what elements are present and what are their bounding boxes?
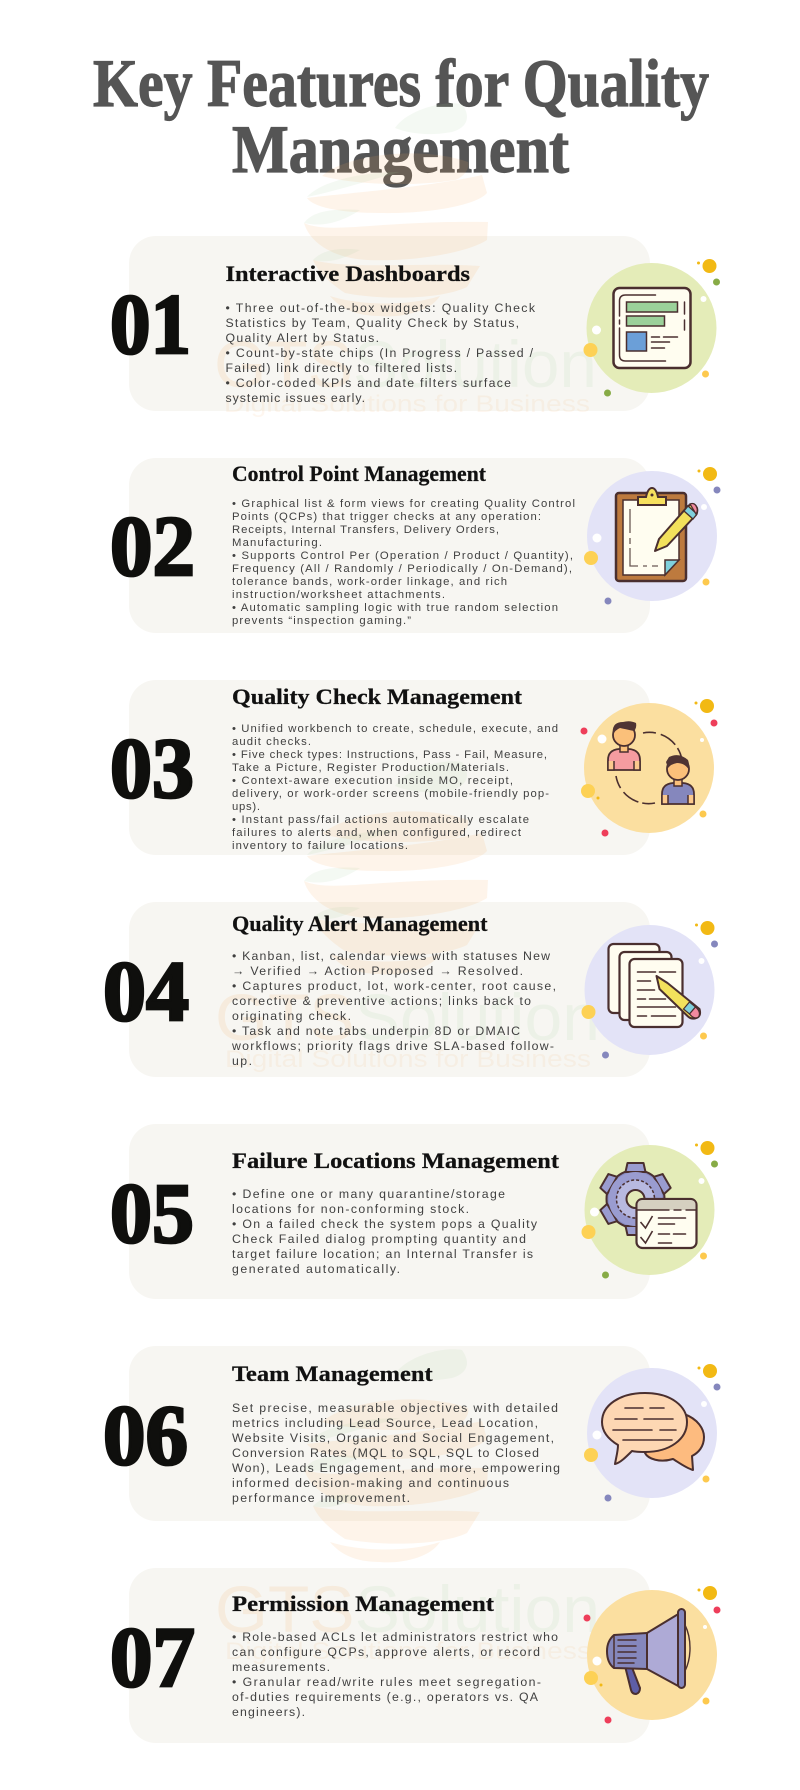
text block: card 06: Won), Leads Engagement, and more, empowering <box>232 1461 560 1475</box>
text block: card 02: Points (QCPs) that trigger checks at any operation: <box>232 511 541 523</box>
text block: card 02: Manufacturing. <box>232 537 322 549</box>
icon: team <box>580 699 718 836</box>
icon: clipboard <box>584 467 720 604</box>
text block: card 05: locations for non-conforming stock. <box>232 1202 469 1216</box>
text block: card 05: generated automatically. <box>232 1262 400 1276</box>
watermark: logo middle <box>304 761 488 974</box>
icon: gear and checklist <box>582 1141 718 1278</box>
text block: card 03: delivery, or work-order screens (mobile-friendly pop- <box>232 788 549 800</box>
title: Key Features for Quality <box>93 45 709 121</box>
text block: card 06: Conversion Rates (MQL to SQL, SQL to Closed <box>232 1446 539 1460</box>
heading: Quality Check Management: Quality Check Management <box>232 684 523 709</box>
text block: card 05: target failure location; an Internal Transfer is <box>232 1247 533 1261</box>
heading: Control Point Management: Control Point Management <box>232 461 487 486</box>
text block: card 02: instruction/worksheet attachments. <box>232 589 445 601</box>
icon: chat bubbles <box>584 1364 720 1502</box>
text block: card 05: • Define one or many quarantine/storage <box>232 1187 505 1201</box>
text block: card 04: originating check. <box>232 1009 351 1023</box>
watermark: brand text top: Digital Solutions for Business <box>224 391 590 418</box>
watermark: logo top <box>304 103 488 316</box>
text block: card 05: • On a failed check the system pops a Quality <box>232 1217 538 1231</box>
watermark: brand text middle: Digital Solutions for Business <box>225 1046 591 1073</box>
panel: card 01 background <box>129 236 650 411</box>
watermark: brand text bottom: Digital Solutions for Business <box>225 1638 591 1665</box>
text block: card 06: Set precise, measurable objectives with detailed <box>232 1401 558 1415</box>
text block: card 04: • Captures product, lot, work-center, root cause, <box>232 979 556 993</box>
text block: card 01 <box>226 301 536 405</box>
text block: card 02: • Graphical list & form views for creating Quality Control <box>232 498 575 510</box>
text block: card 06: performance improvement. <box>232 1491 410 1505</box>
number 07: 07 <box>110 1609 195 1705</box>
text block: card 01: Quality Alert by Status. <box>226 331 379 345</box>
text block: card 03 <box>232 723 558 852</box>
text block: card 04 <box>231 949 556 1068</box>
heading: Quality Alert Management: Quality Alert Management <box>232 911 488 936</box>
panel: card 05 background <box>129 1124 650 1299</box>
text block: card 05: Check Failed dialog prompting quantity and <box>232 1232 526 1246</box>
text block: card 02: tolerance bands, work-order linkage, and rich <box>232 576 507 588</box>
text block: card 07: measurements. <box>232 1660 330 1674</box>
number 05: 05 <box>110 1165 194 1261</box>
text block: card 07: engineers). <box>232 1705 305 1719</box>
text block: card 03: failures to alerts and, when configured, redirect <box>232 827 522 839</box>
number 06: 06 <box>103 1387 188 1483</box>
watermark: brand text top: GTSSolution <box>214 327 597 401</box>
heading: Interactive Dashboards: Interactive Dashboards <box>226 261 470 286</box>
text block: card 06: Website Visits, Organic and Social Engagement, <box>232 1431 554 1445</box>
icon: documents with pencil <box>582 921 718 1058</box>
number 02: 02 <box>110 498 195 594</box>
text block: card 07: • Role-based ACLs let administrators restrict who <box>232 1630 558 1644</box>
title <box>93 45 709 187</box>
heading: Team Management: Team Management <box>232 1361 433 1386</box>
text block: card 06: metrics including Lead Source, Lead Location, <box>232 1416 538 1430</box>
text block: card 05 <box>232 1187 538 1276</box>
panel: card 07 background <box>129 1568 650 1743</box>
text block: card 03: • Five check types: Instructions, Pass - Fail, Measure, <box>232 749 547 761</box>
text block: card 02: Frequency (All / Randomly / Periodically / On-Demand), <box>232 563 572 575</box>
text block: card 03: • Instant pass/fail actions automatically escalate <box>232 814 529 826</box>
panel: card 04 background <box>129 902 650 1077</box>
text block: card 03: audit checks. <box>232 736 311 748</box>
text block: card 03: • Unified workbench to create, schedule, execute, and <box>232 723 558 735</box>
text block: card 03: inventory to failure locations. <box>232 840 408 852</box>
panel: card 06 background <box>129 1346 650 1521</box>
text block: card 04: → Verified → Action Proposed → Resolved. <box>232 964 523 978</box>
heading: Failure Locations Management: Failure Locations Management <box>232 1148 560 1173</box>
text block: card 01: • Three out-of-the-box widgets: Quality Check <box>226 301 536 315</box>
title: Management <box>232 111 569 187</box>
text block: card 07 <box>232 1630 558 1719</box>
text block: card 06: informed decision-making and continuous <box>232 1476 509 1490</box>
text block: card 02: • Supports Control Per (Operation / Product / Quantity), <box>232 550 573 562</box>
number 03: 03 <box>110 720 194 816</box>
panel: card 02 background <box>129 458 650 633</box>
text block: card 04: workflows; priority flags drive SLA-based follow- <box>231 1039 554 1053</box>
panel: card 03 background <box>129 680 650 855</box>
text block: card 02: Receipts, Internal Transfers, Delivery Orders, <box>232 524 499 536</box>
watermark: logo bottom <box>304 1349 488 1562</box>
text block: card 03: Take a Picture, Register Production/Materials. <box>232 762 509 774</box>
text block: card 07: can configure QCPs, approve alerts, or record <box>232 1645 540 1659</box>
text block: card 03: • Context-aware execution inside MO, receipt, <box>232 775 513 787</box>
icon: dashboard <box>584 259 720 396</box>
text block: card 06 <box>232 1401 560 1505</box>
text block: card 07: of-duties requirements (e.g., operators vs. QA <box>232 1690 539 1704</box>
text block: card 01: • Count-by-state chips (In Progress / Passed / <box>226 346 534 360</box>
text block: card 07: • Granular read/write rules meet segregation- <box>232 1675 541 1689</box>
text block: card 01: • Color-coded KPIs and date filters surface <box>226 376 511 390</box>
text block: card 03: ups). <box>232 801 260 813</box>
text block: card 04: • Task and note tabs underpin 8D or DMAIC <box>232 1024 520 1038</box>
watermark: brand text middle: GTSSolution <box>215 980 600 1054</box>
text block: card 04: • Kanban, list, calendar views with statuses New <box>232 949 550 963</box>
watermark: brand text bottom: GTSSolution <box>215 1572 600 1646</box>
text block: card 02: • Automatic sampling logic with true random selection <box>232 602 558 614</box>
icon: megaphone <box>584 1586 720 1724</box>
text block: card 01: Statistics by Team, Quality Check by Status, <box>226 316 519 330</box>
text block: card 01: Failed) link directly to filtered lists. <box>226 361 457 375</box>
text block: card 04: corrective & preventive actions; links back to <box>232 994 531 1008</box>
number 01: 01 <box>110 276 191 372</box>
heading: Permission Management: Permission Management <box>232 1591 495 1616</box>
text block: card 01: systemic issues early. <box>226 391 365 405</box>
text block: card 02 <box>232 498 575 627</box>
number 04: 04 <box>103 943 189 1039</box>
text block: card 02: prevents “inspection gaming.” <box>232 615 411 627</box>
text block: card 04: up. <box>232 1054 252 1068</box>
